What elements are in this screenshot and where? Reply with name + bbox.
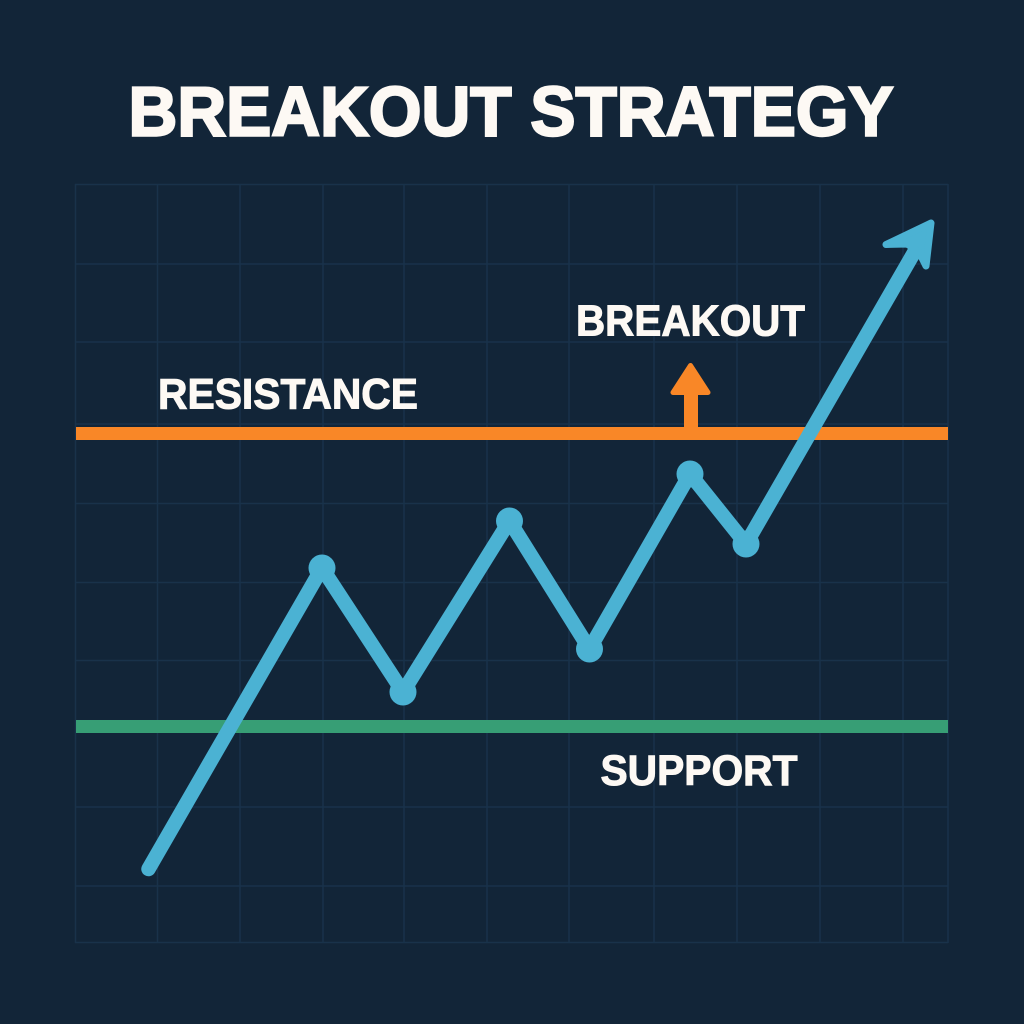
resistance label: RESISTANCE: [158, 372, 418, 418]
resistance line: [76, 427, 948, 440]
price pivot points: [308, 460, 760, 706]
support line: [76, 720, 948, 733]
price arrowhead: [886, 223, 931, 266]
title: BREAKOUT STRATEGY: [128, 72, 894, 150]
icon: breakout arrow: [673, 366, 708, 428]
breakout label: BREAKOUT: [576, 298, 805, 346]
support label: SUPPORT: [600, 748, 798, 795]
price line chart: [148, 223, 931, 869]
